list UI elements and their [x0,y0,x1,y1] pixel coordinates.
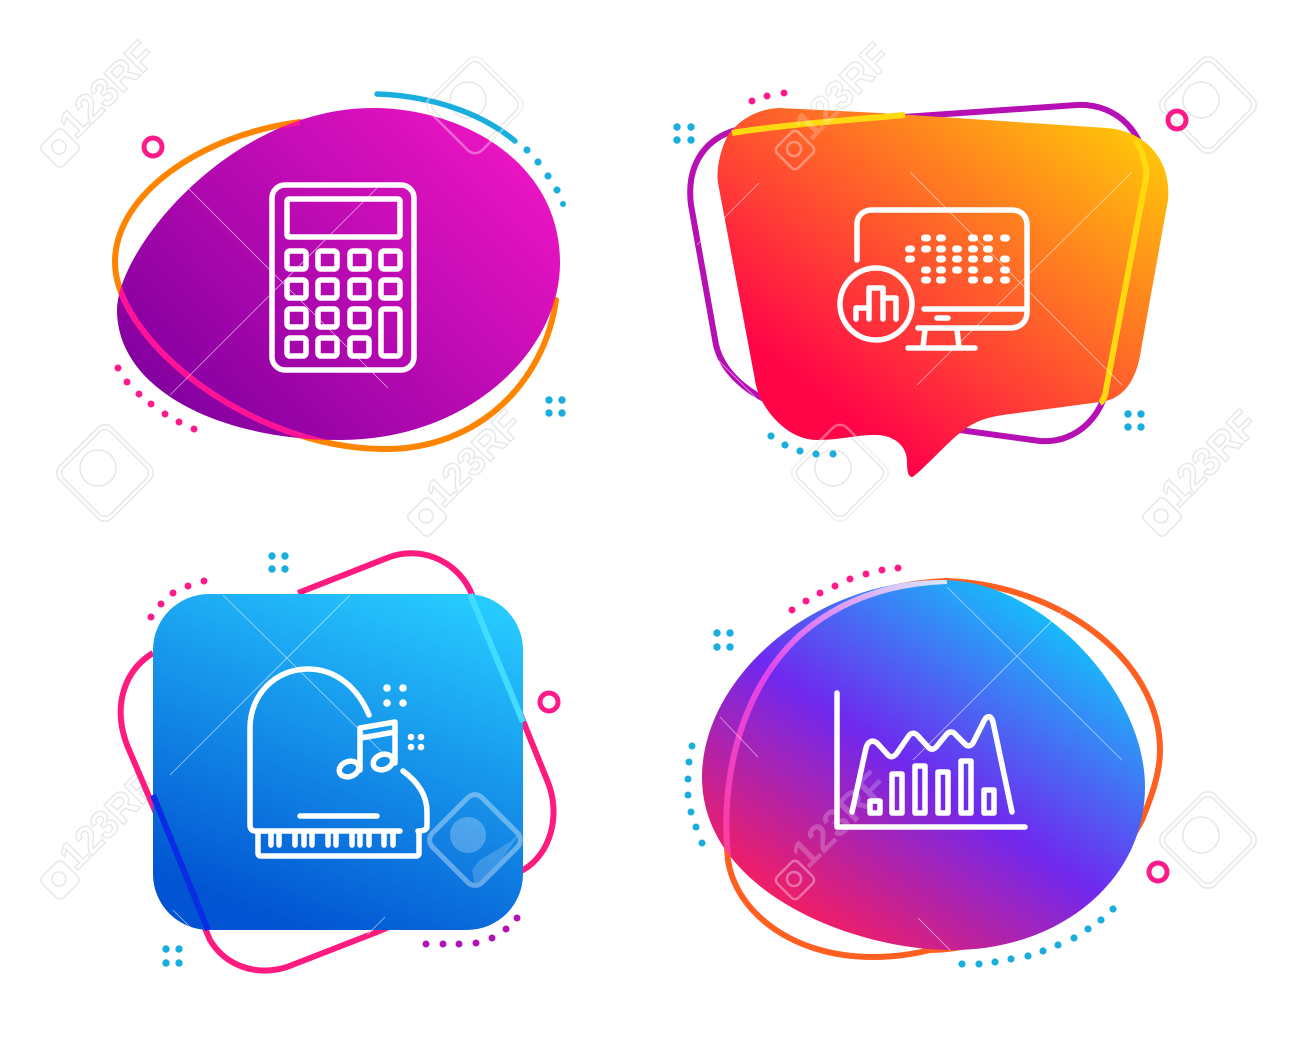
dots: purple [422,914,520,948]
dots: pink [748,90,788,104]
ring marker: pink [1168,111,1186,129]
dots: blue cluster left [673,123,695,144]
watermark: grey stamps behind the shapes: 123RF [786,35,899,148]
blob: blue to pink [702,580,1145,950]
blob: magenta [117,108,560,440]
dots: blue cluster [713,629,734,651]
ring marker: pink [144,138,162,156]
watermark: translucent stamps and hairlines over the shapes [170,35,1132,950]
panel: histogram chart [684,564,1167,968]
dots: blue bottom [958,905,1117,968]
blob: orange speech bubble [717,108,1168,477]
dots: blue cluster bottom [162,945,183,967]
dots: pink [114,364,198,432]
watermark: grey stamps behind the shapes: 123RF [51,33,164,146]
watermark: grey stamps behind the shapes: 123RF [51,765,164,878]
icon: grand piano with music note [250,669,427,856]
ring overlap: pink [115,122,556,449]
dots: pink [788,564,902,614]
ring overlap: light and dark blue [153,594,523,930]
watermark: translucent stamps and hairlines over the shapes: 123RF [786,35,899,148]
ring overlap: pink to lavender [726,581,947,858]
icon: histogram with trend line [837,693,1025,827]
dots: blue left [684,742,706,846]
dots: pink [148,578,208,620]
ring overlap: yellow [732,115,1146,403]
ring marker: pink [540,693,558,711]
blob: blue rounded square [153,594,523,930]
panel: calculator [114,94,566,449]
ring: purple outline [690,105,1146,441]
watermark: translucent stamps and hairlines over the shapes: 123RF [783,763,896,876]
ring: orange-red outline [726,581,1160,957]
icon: monitor with chart [840,210,1027,348]
ring: orange outline [115,122,556,449]
watermark: grey stamps behind the shapes [39,33,1266,901]
dots: blue bottom [767,432,837,458]
ring marker: pink [1149,863,1167,881]
ring: pink rotated square [121,553,554,971]
watermark: grey stamps behind the shapes: 123RF [418,402,531,515]
watermark: grey stamps behind the shapes: 123RF [1153,402,1266,515]
dots: blue cluster right [1124,410,1145,431]
dots: blue cluster [545,396,566,417]
panel: grand piano [121,552,558,971]
panel: monitor statistics [673,90,1186,477]
icon: calculator [272,185,414,370]
dots: blue cluster top [268,552,289,573]
dots: blue [523,146,566,207]
arc: blue [377,94,515,141]
